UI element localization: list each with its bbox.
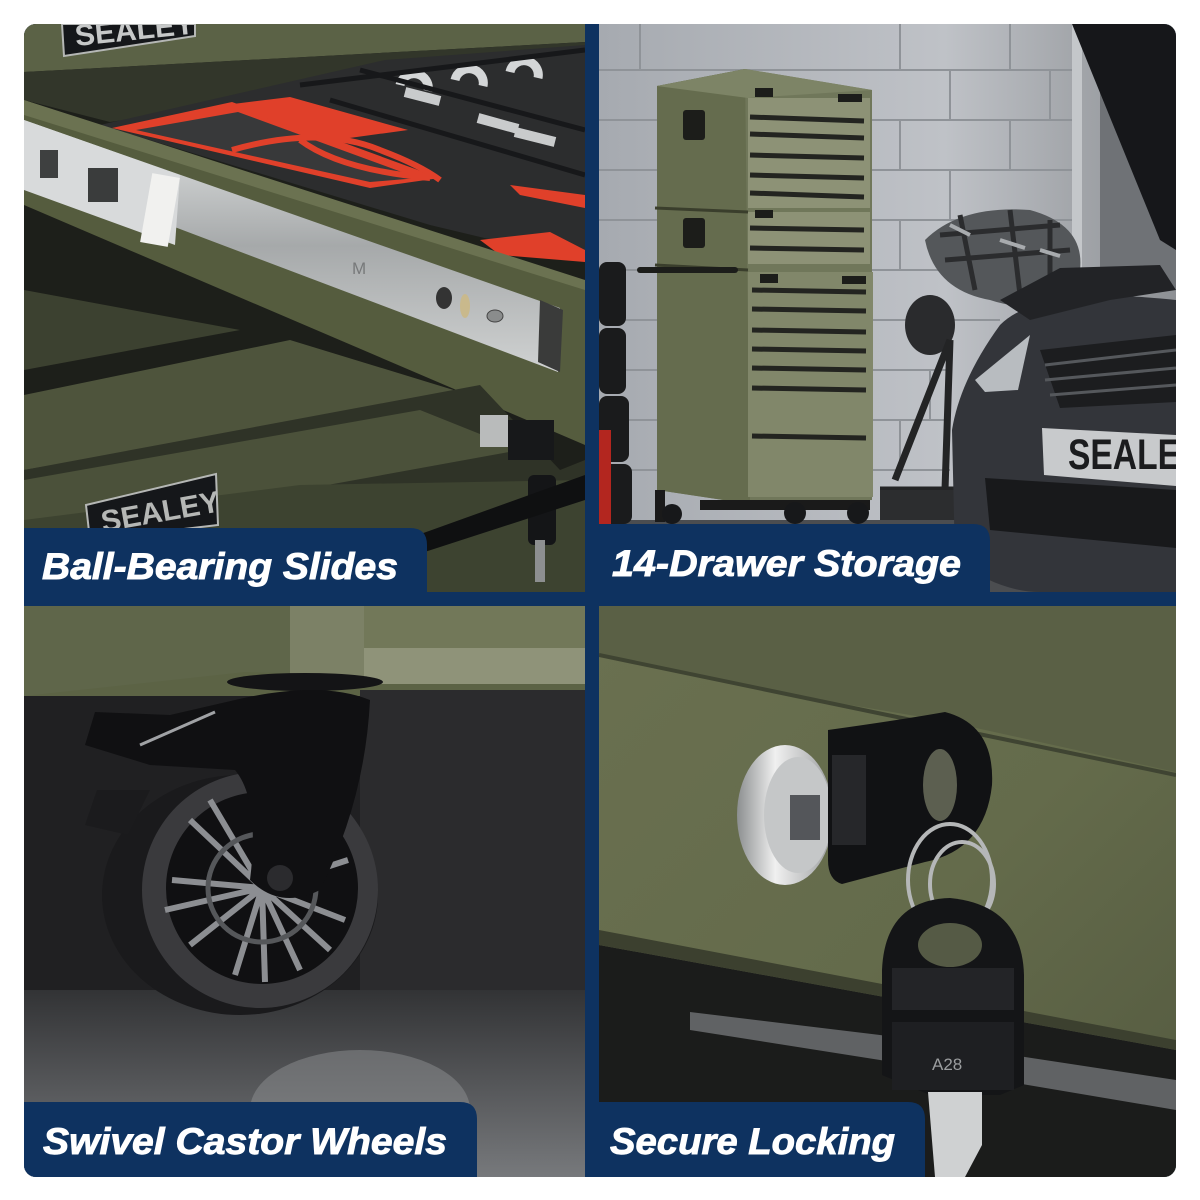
sealey badge bottom: SEALEY — [98, 486, 222, 539]
sealey badge top: SEALEY — [73, 8, 196, 53]
tool chest — [640, 69, 873, 524]
label: 14-drawer storage: 14-Drawer Storage — [612, 542, 961, 584]
key in lock — [828, 712, 992, 884]
label: ball-bearing slides: Ball-Bearing Slides — [42, 545, 398, 587]
hanging key — [882, 898, 1024, 1177]
castor wheel — [85, 673, 383, 1015]
label: secure locking — [585, 1102, 925, 1177]
sealey badge top — [61, 24, 196, 58]
drawer side — [24, 100, 585, 445]
slide rail: M — [352, 259, 366, 278]
panel: 14-drawer storage photo — [599, 24, 1180, 592]
slide rail — [24, 120, 563, 372]
engine on stand — [880, 209, 1080, 520]
label: ball-bearing slides — [24, 528, 427, 592]
tyres — [599, 262, 632, 524]
tool tray foam — [100, 45, 585, 262]
car — [952, 265, 1180, 592]
label: 14-drawer storage — [599, 524, 990, 592]
lower drawers — [24, 290, 240, 370]
label: secure locking: Secure Locking — [610, 1120, 895, 1162]
label: swivel castor wheels — [24, 1102, 477, 1177]
hanging key: A28 — [932, 1055, 962, 1074]
key ring — [906, 822, 996, 910]
sealey badge bottom — [84, 472, 219, 528]
label: swivel castor wheels: Swivel Castor Wheels — [43, 1120, 447, 1162]
lock and key — [480, 415, 556, 582]
panel: secure locking photo — [599, 606, 1176, 1177]
panel: swivel castor wheels photo — [24, 606, 585, 1177]
panel: ball-bearing slides photo — [24, 8, 585, 592]
lock barrel — [737, 745, 833, 885]
